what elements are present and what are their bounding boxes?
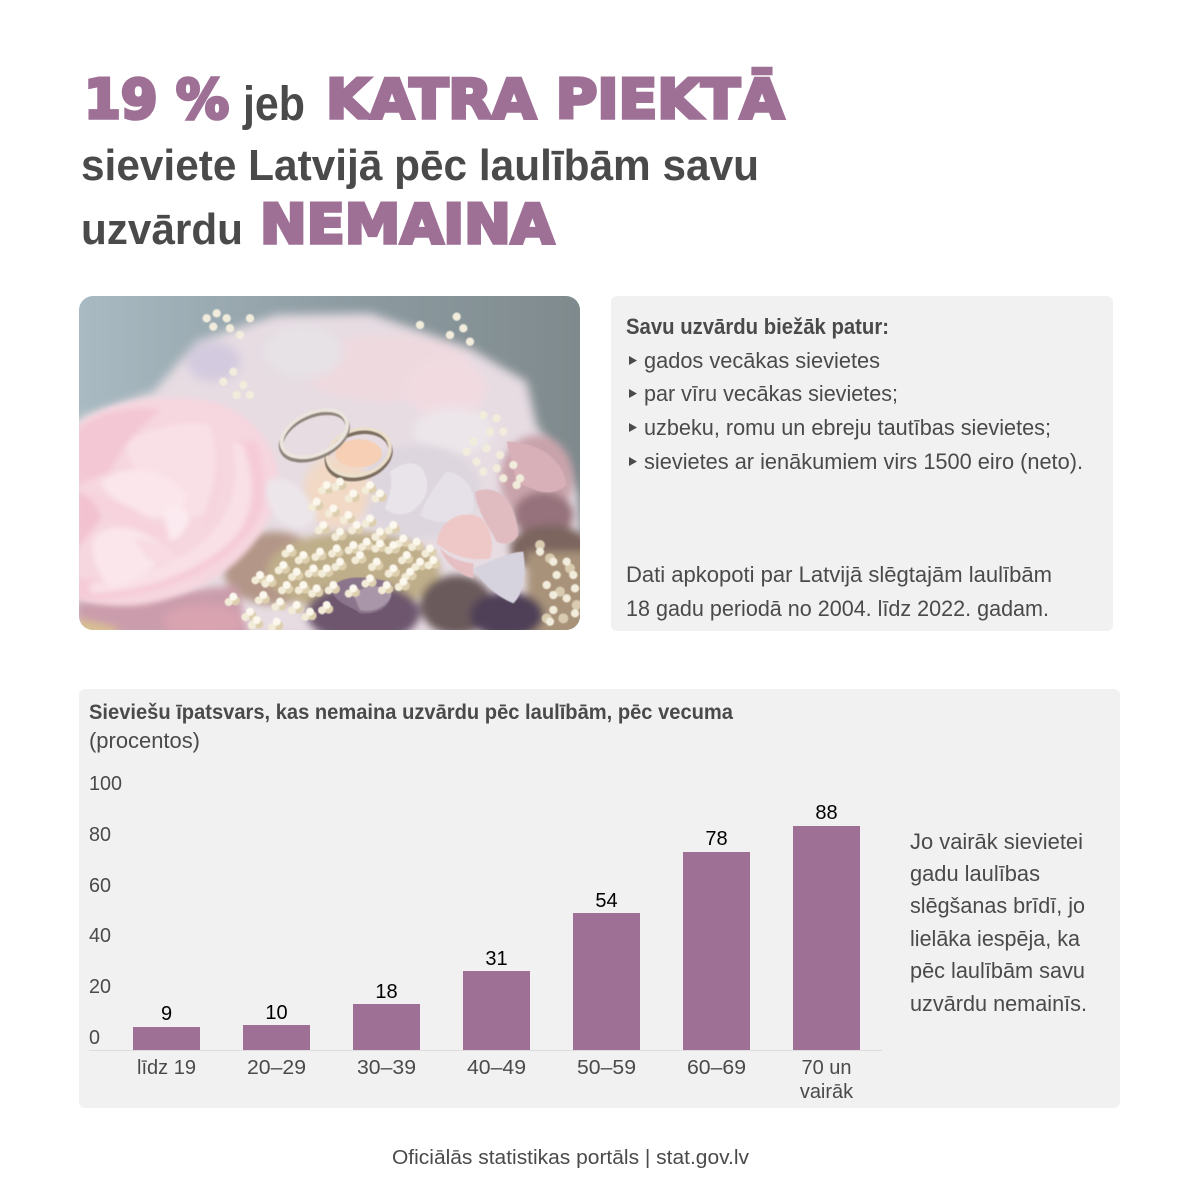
- age categories: 30–39: [357, 1057, 416, 1079]
- bars: [133, 826, 860, 1050]
- age categories: 50–59: [577, 1057, 636, 1079]
- bullet list: par vīru vecākas sievietes;: [644, 381, 898, 406]
- age categories: 40–49: [467, 1057, 526, 1079]
- chart commentary: Jo vairāk sievietei: [910, 829, 1083, 854]
- icon: rings: [278, 409, 394, 482]
- title line 3: uzvārdu: [81, 205, 243, 254]
- title: [81, 68, 784, 256]
- y axis labels: 100: [89, 773, 122, 795]
- bar values: 9: [161, 1003, 172, 1025]
- chart unit: (procentos): [89, 728, 200, 753]
- panel: chart: [79, 689, 1120, 1108]
- bar values: 10: [265, 1002, 288, 1024]
- bar values: 88: [815, 802, 838, 824]
- photo: wedding rings on bouquet: [77, 296, 590, 643]
- y axis labels: 80: [89, 824, 111, 846]
- center and right petals: [330, 442, 567, 614]
- title line 1: 19 %: [84, 68, 229, 131]
- age categories: [137, 1057, 854, 1103]
- title line 3: NEMAINA: [260, 193, 554, 256]
- chart commentary: [910, 829, 1087, 1016]
- chart commentary: lielāka iespēja, ka: [910, 926, 1081, 951]
- y axis labels: [89, 773, 122, 1049]
- age categories: līdz 19: [137, 1057, 196, 1079]
- title line 1: KATRA PIEKTĀ: [326, 68, 784, 131]
- title line 2: sieviete Latvijā pēc laulībām savu: [81, 141, 759, 190]
- chart commentary: gadu laulības: [910, 861, 1040, 886]
- title line 3: [81, 193, 554, 256]
- y axis labels: 40: [89, 925, 111, 947]
- y axis labels: 60: [89, 875, 111, 897]
- y axis labels: 20: [89, 976, 111, 998]
- chart commentary: slēgšanas brīdī, jo: [910, 893, 1085, 918]
- panel heading: Savu uzvārdu biežāk patur:: [626, 314, 889, 339]
- bar values: [161, 802, 838, 1025]
- bar values: 78: [705, 828, 728, 850]
- bullet list: [629, 348, 1083, 474]
- y axis labels: 0: [89, 1027, 100, 1049]
- data note: [626, 562, 1052, 621]
- bullet list: gados vecākas sievietes: [644, 348, 880, 373]
- footer source: Oficiālās statistikas portāls | stat.gov.lv: [392, 1147, 749, 1169]
- baby's breath: [207, 313, 577, 627]
- bullet list: uzbeku, romu un ebreju tautības sievietes;: [644, 415, 1051, 440]
- bar chart: [89, 773, 882, 1103]
- chart heading: Sieviešu īpatsvars, kas nemaina uzvārdu pēc laulībām, pēc vecuma: [89, 701, 733, 724]
- bar values: 31: [485, 948, 508, 970]
- bullet list: sievietes ar ienākumiem virs 1500 eiro (neto).: [644, 449, 1083, 474]
- bar values: 54: [595, 890, 618, 912]
- chart commentary: pēc laulībām savu: [910, 958, 1085, 983]
- age categories: 60–69: [687, 1057, 746, 1079]
- chart commentary: uzvārdu nemainīs.: [910, 991, 1087, 1016]
- data note: 18 gadu periodā no 2004. līdz 2022. gadam.: [626, 596, 1049, 621]
- panel: who keeps their surname: [611, 296, 1113, 631]
- left peony: [77, 397, 317, 606]
- age categories: vairāk: [800, 1081, 854, 1103]
- age categories: 20–29: [247, 1057, 306, 1079]
- age categories: 70 un: [801, 1057, 852, 1079]
- title line 1: [84, 68, 784, 131]
- data note: Dati apkopoti par Latvijā slēgtajām laulībām: [626, 562, 1052, 587]
- title line 1: jeb: [242, 78, 305, 131]
- bar values: 18: [375, 981, 398, 1003]
